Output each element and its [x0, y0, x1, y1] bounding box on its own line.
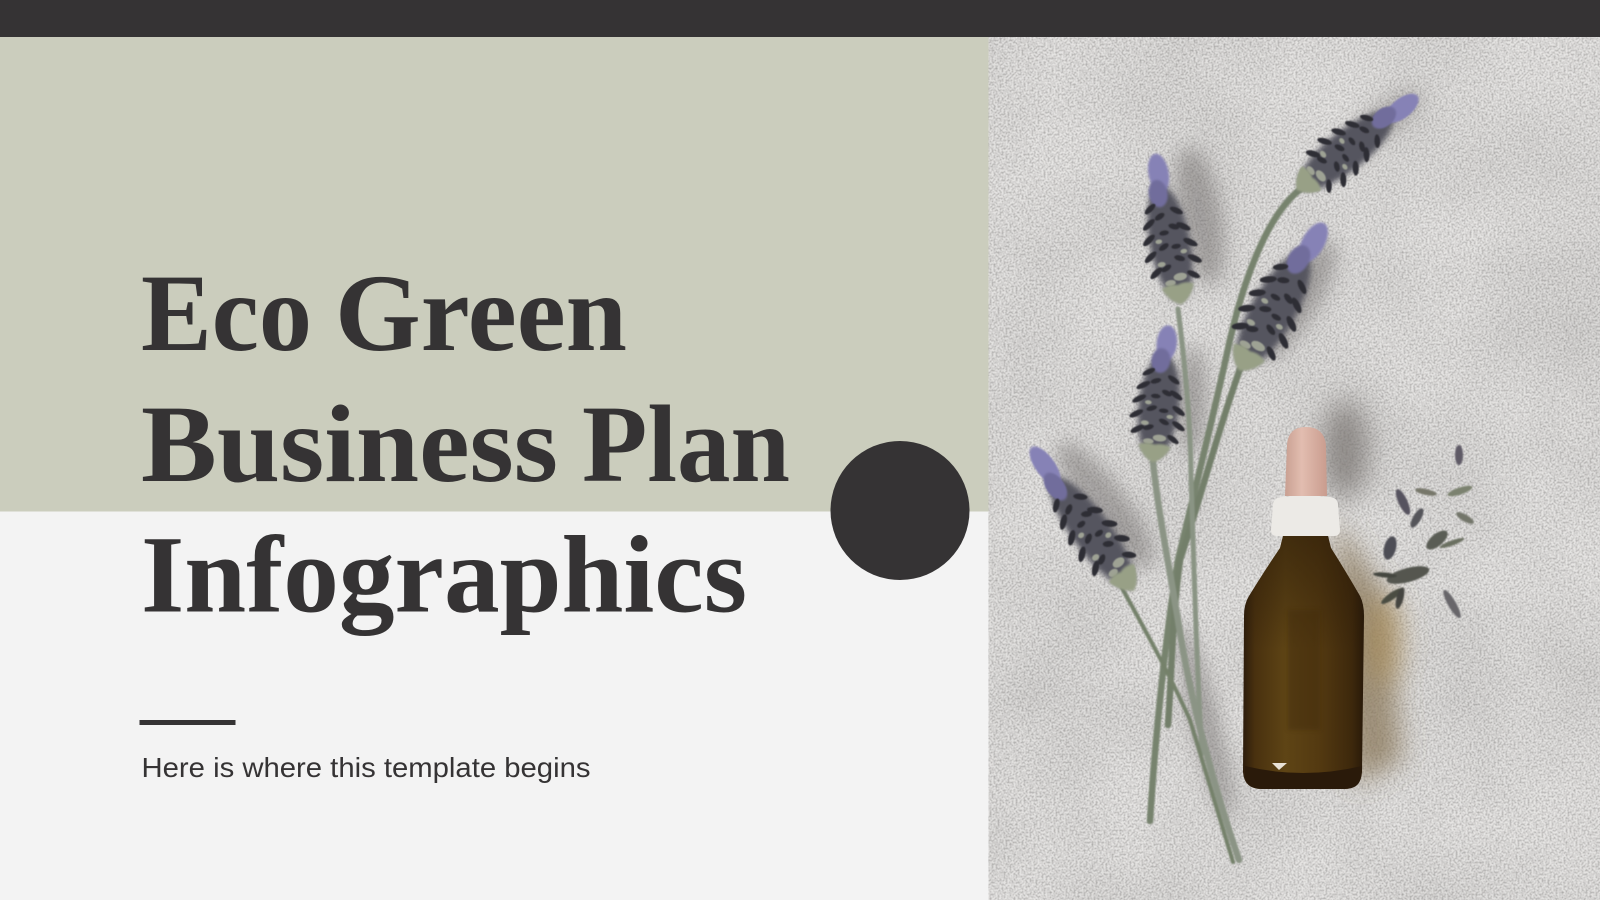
- divider line: [140, 720, 236, 725]
- lavender head: centre left: [1124, 322, 1197, 465]
- top bar: [0, 0, 1600, 37]
- pink rubber bulb: [1285, 427, 1327, 496]
- dropper bottle: [1243, 427, 1364, 789]
- white cap: [1271, 496, 1340, 536]
- lavender head: left: [1008, 431, 1157, 607]
- bottle body: [1243, 536, 1364, 789]
- title: Eco: [141, 252, 312, 374]
- lavender head: centre right: [1211, 206, 1351, 387]
- lavender shadows: [1043, 83, 1427, 820]
- title: Infographics: [141, 514, 747, 636]
- bottle shadow: [1321, 400, 1403, 785]
- inner dropper tube: [1288, 610, 1320, 730]
- lavender head: upper right: [1279, 73, 1434, 212]
- loose lavender florets: [1373, 445, 1475, 620]
- subtitle: Here is where this template begins: [142, 752, 590, 783]
- panel: sage green block: [0, 37, 989, 512]
- title: [141, 252, 790, 636]
- lavender head: centre top: [1125, 149, 1210, 310]
- lavender stems: [1122, 188, 1302, 862]
- dark circle: [830, 441, 970, 580]
- title: Green: [335, 252, 627, 374]
- title: Plan: [582, 383, 790, 505]
- panel: photo of lavender and dropper bottle: [988, 37, 1600, 900]
- glass top shading: [1243, 536, 1364, 789]
- glass bottom and highlight: [1245, 766, 1362, 789]
- title: Business: [141, 383, 558, 505]
